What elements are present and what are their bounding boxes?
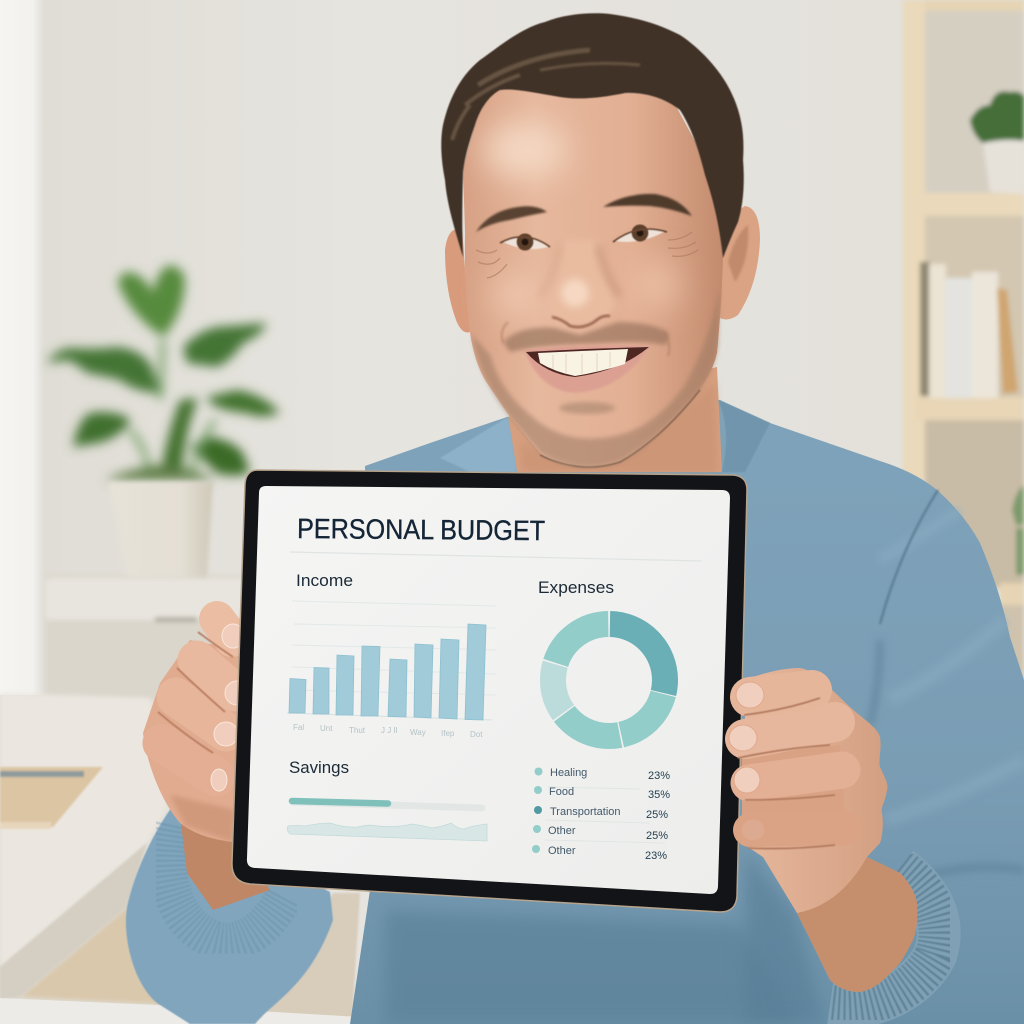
- income heading: Income: [296, 571, 353, 590]
- legend row: transportation: Transportation: [550, 806, 621, 818]
- legend row: other second: [532, 845, 667, 862]
- smile mouth: [524, 345, 650, 393]
- bar axis labels: [293, 723, 483, 739]
- foreground table edge: [0, 998, 420, 1024]
- title divider: [290, 552, 702, 561]
- legend row: healing: [534, 767, 670, 782]
- neck shadow: [520, 380, 718, 472]
- sweater collar left: [440, 417, 517, 472]
- left palm: [143, 640, 250, 842]
- left ear: [445, 229, 470, 332]
- teeth: [538, 349, 628, 376]
- sweater collar right: [718, 400, 770, 472]
- right nails: [729, 682, 764, 840]
- savings area sparkline: [287, 823, 487, 841]
- right hand and forearm silhouette: [745, 668, 917, 992]
- right finger shadows: [738, 698, 835, 849]
- nose: [540, 240, 620, 327]
- wood panel under desk: [20, 907, 165, 1005]
- shoulder seam: [880, 490, 938, 624]
- desk surface left: [0, 693, 167, 967]
- window curtain: [0, 0, 44, 695]
- white console behind desk: [46, 575, 246, 700]
- forehead and cheek highlights: [483, 122, 679, 315]
- left finger gaps: [158, 632, 233, 753]
- tablet bezel: [232, 470, 747, 912]
- expenses legend: [532, 767, 670, 862]
- legend row: other: Other: [548, 825, 576, 837]
- hair: [441, 13, 744, 258]
- bar axis labels: J J Il: [381, 726, 398, 735]
- potted plant on the left: [47, 265, 280, 577]
- sweater body: [350, 400, 1024, 1024]
- left forearm: [180, 815, 270, 910]
- left palm shadow: [170, 795, 235, 842]
- legend row: food: [534, 786, 670, 801]
- legend row: healing: 23%: [648, 770, 670, 782]
- legend row: food: 35%: [648, 789, 670, 801]
- left eye: [500, 234, 550, 250]
- legend row: food: Food: [549, 786, 574, 798]
- jaw line: [540, 390, 700, 467]
- face: [463, 85, 723, 468]
- income bar chart: [287, 601, 496, 739]
- plant leaves: [47, 265, 280, 480]
- tablet screen: [247, 486, 730, 894]
- bar axis labels: Dot: [470, 730, 483, 739]
- wall gap right of sleeve: [260, 893, 360, 1020]
- smile creases: [502, 322, 669, 356]
- moustache: [503, 322, 668, 352]
- left nails: [211, 624, 249, 791]
- neck: [508, 367, 722, 472]
- right hand: [729, 668, 917, 992]
- hair highlights: [452, 50, 640, 140]
- legend row: transportation: [534, 806, 668, 821]
- bar axis labels: Unt: [320, 724, 333, 733]
- left sleeve: [126, 807, 333, 1024]
- right eye: [613, 224, 667, 242]
- legend row: healing: Healing: [550, 767, 587, 779]
- left fingers: [162, 619, 234, 777]
- right ear: [720, 206, 760, 319]
- savings progress bar: [292, 801, 482, 808]
- plant pot: [108, 482, 213, 577]
- left cuff ribbing: [168, 825, 285, 942]
- eye wrinkles: [476, 232, 698, 278]
- palm visible between fingers: [742, 745, 845, 820]
- wooden shelving unit: [903, 0, 1024, 680]
- bar axis labels: Thut: [349, 726, 366, 735]
- lower body shadow: [385, 910, 800, 1024]
- bar axis labels: Ifep: [441, 729, 455, 738]
- legend row: other: [533, 825, 668, 842]
- expenses heading: Expenses: [538, 578, 614, 597]
- chin stubble: [559, 402, 615, 414]
- lower shelf plant: [1012, 485, 1024, 575]
- right sleeve cuff: [830, 868, 939, 1006]
- shelf plant: [970, 91, 1024, 194]
- desk front edge: [0, 843, 147, 1000]
- bar axis labels: Way: [410, 728, 426, 737]
- expenses donut chart: [553, 624, 665, 736]
- stubble beard: [472, 285, 720, 467]
- bar axis labels: Fal: [293, 723, 304, 732]
- books on shelf: [920, 262, 1018, 398]
- notebook on desk: [0, 767, 103, 829]
- legend row: transportation: 25%: [646, 809, 668, 821]
- left hand: [143, 619, 250, 842]
- right forearm: [797, 857, 917, 992]
- savings heading: Savings: [289, 758, 349, 777]
- legend row: other second: 23%: [645, 850, 667, 862]
- legend row: other: 25%: [646, 830, 668, 842]
- title: PERSONAL BUDGET: [297, 513, 545, 546]
- left eyebrow: [476, 206, 547, 232]
- tablet: [232, 470, 747, 912]
- right eyebrow: [603, 194, 692, 216]
- sweater folds: [870, 510, 1024, 885]
- right fingers: [745, 690, 845, 830]
- legend row: other second: Other: [548, 845, 576, 857]
